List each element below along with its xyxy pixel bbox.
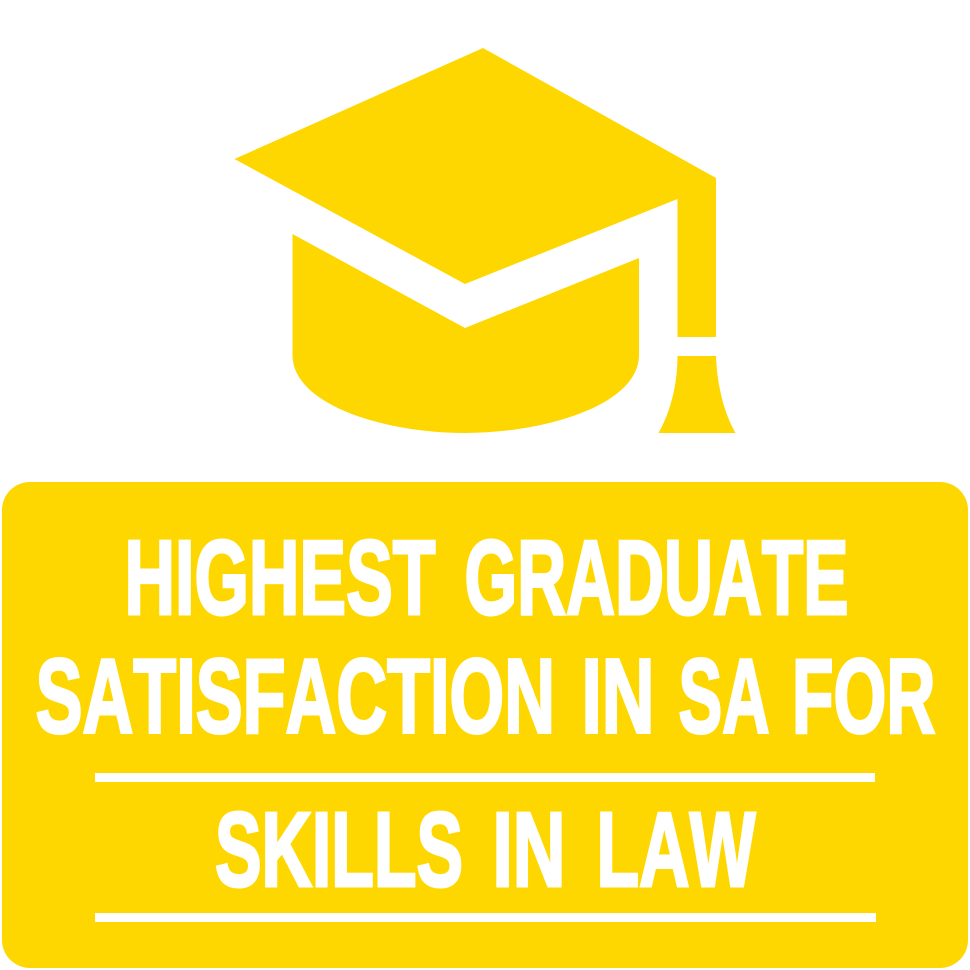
tassel [658, 356, 736, 433]
heading line 2: SA [678, 638, 770, 756]
heading line 2: IN [582, 638, 654, 756]
icon: graduation cap [234, 48, 736, 433]
cap base [292, 234, 639, 433]
lower rule [95, 913, 876, 922]
heading line 3: IN [492, 791, 566, 909]
panel background [2, 482, 968, 968]
upper rule [95, 773, 875, 782]
heading line 3: LAW [596, 791, 756, 909]
heading line 3: SKILLS [215, 791, 463, 909]
heading line 1 [124, 519, 848, 637]
panel: headline [2, 482, 968, 968]
heading line 2: SATISFACTION [36, 638, 555, 756]
cap top board with tassel cord [234, 48, 716, 337]
heading line 1: HIGHEST [124, 519, 436, 637]
heading line 3 [215, 791, 756, 909]
